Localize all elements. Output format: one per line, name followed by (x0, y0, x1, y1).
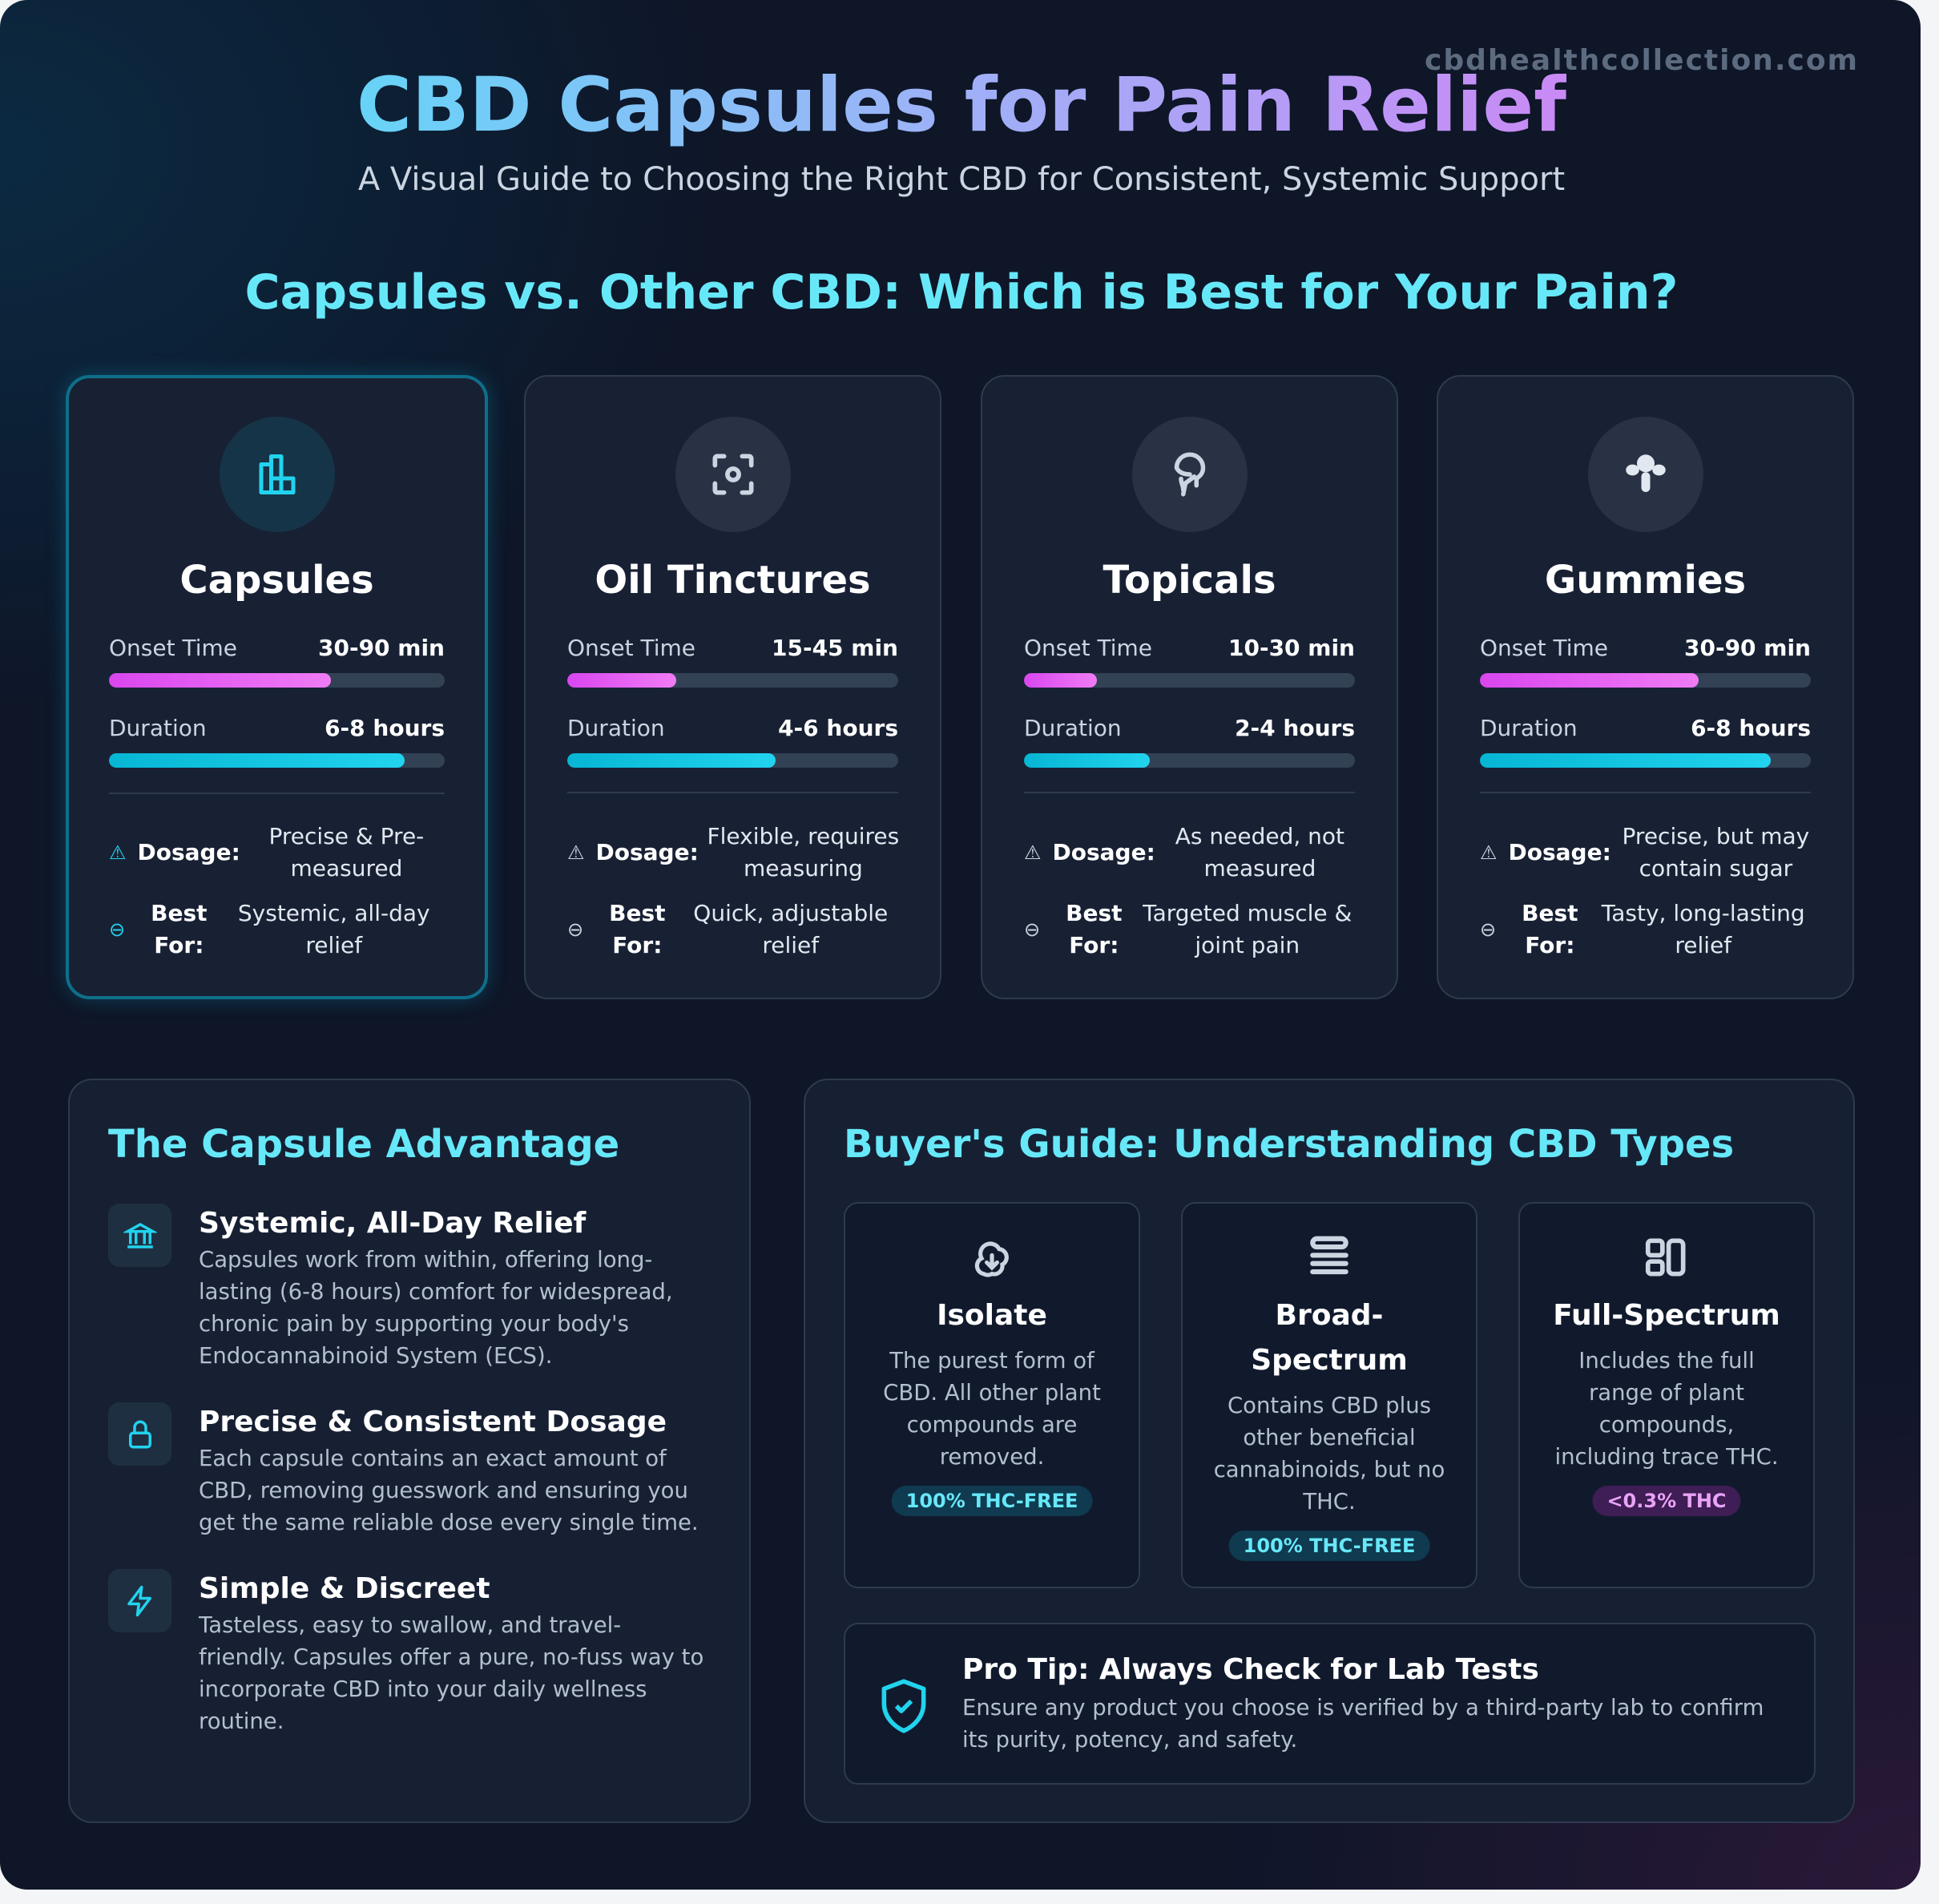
panel: capsule advantage: friendly. Capsules offer a pure, no-fuss way to (199, 1644, 703, 1670)
panel: capsule advantage: Systemic, All-Day Relief (199, 1207, 586, 1240)
panel: capsule advantage: Precise & Consistent Dosage (199, 1406, 667, 1438)
panel: capsule advantage: lasting (6-8 hours) comfort for widespread, (199, 1279, 673, 1305)
best for: For: (1525, 932, 1574, 958)
best for: ⊖ (1480, 918, 1496, 941)
best for: ⊖ (1024, 918, 1040, 941)
duration row (1024, 715, 1355, 741)
best for: Quick, adjustable (693, 900, 888, 926)
dosage: As needed, not (1175, 823, 1344, 849)
dosage: measured (1203, 855, 1316, 881)
best for (109, 900, 430, 958)
subcard: full-spectrum: including trace THC. (1554, 1444, 1779, 1470)
subcard: full-spectrum (1518, 1202, 1815, 1588)
watermark: cbdhealthcollection.com (1425, 44, 1859, 77)
subcard: full-spectrum: Full-Spectrum (1553, 1299, 1780, 1332)
card: topicals (981, 375, 1398, 999)
dosage (109, 823, 424, 881)
callout: pro tip: Pro Tip: Always Check for Lab Tests (962, 1653, 1539, 1686)
subcard: broad-spectrum: cannabinoids, but no (1214, 1457, 1445, 1482)
best for: relief (762, 932, 819, 958)
best for: Best (609, 900, 665, 926)
duration row: 6-8 hours (325, 715, 445, 741)
title: CBD Capsules for Pain Relief (357, 62, 1566, 149)
best for (1024, 900, 1352, 958)
duration row: 6-8 hours (1691, 715, 1811, 741)
duration row: Duration (109, 715, 207, 741)
duration row: 4-6 hours (778, 715, 898, 741)
onset row: 10-30 min (1228, 635, 1355, 661)
best for: ⊖ (567, 918, 583, 941)
panel: capsule advantage: Simple & Discreet (199, 1572, 490, 1605)
onset row: Onset Time (1480, 635, 1608, 661)
dosage: ⚠ (1480, 841, 1498, 864)
panel: capsule advantage (68, 1079, 751, 1823)
subcard: isolate: CBD. All other plant (883, 1380, 1101, 1406)
card: oil tinctures (524, 375, 941, 999)
subcard: broad-spectrum: other beneficial (1243, 1425, 1416, 1450)
subcard: isolate: Isolate (937, 1299, 1047, 1332)
onset row (1480, 635, 1811, 661)
item: precise dosage (108, 1402, 699, 1535)
subcard: full-spectrum: range of plant (1589, 1380, 1744, 1406)
panel heading: The Capsule Advantage (108, 1122, 619, 1167)
dosage (1480, 823, 1809, 881)
subcard: broad-spectrum: THC. (1303, 1489, 1356, 1515)
panel: capsule advantage: Endocannabinoid System (ECS). (199, 1343, 552, 1369)
duration row: Duration (1480, 715, 1578, 741)
subcard: isolate: removed. (940, 1444, 1044, 1470)
best for: For: (1069, 932, 1119, 958)
item: simple discreet (108, 1569, 703, 1734)
best for: Best (1066, 900, 1122, 926)
card title: Oil Tinctures (595, 558, 871, 603)
panel: capsule advantage: Capsules work from within, offering long- (199, 1247, 652, 1273)
subcard: broad-spectrum: Contains CBD plus (1227, 1393, 1431, 1418)
duration row: 2-4 hours (1235, 715, 1355, 741)
panel: capsule advantage: chronic pain by supporting your body's (199, 1311, 629, 1337)
onset row: Onset Time (567, 635, 695, 661)
card: capsules (66, 375, 488, 999)
dosage: Precise & Pre- (269, 823, 424, 849)
subcard: full-spectrum: compounds, (1599, 1412, 1734, 1438)
panel: capsule advantage: Tasteless, easy to swallow, and travel- (199, 1612, 621, 1638)
best for (567, 900, 888, 958)
best for: joint pain (1195, 932, 1300, 958)
duration row: Duration (1024, 715, 1122, 741)
panel: capsule advantage: incorporate CBD into your daily wellness (199, 1676, 647, 1702)
dosage: Flexible, requires (707, 823, 899, 849)
best for: relief (305, 932, 362, 958)
best for (1480, 900, 1805, 958)
panel: capsule advantage: routine. (199, 1708, 284, 1734)
onset row: 30-90 min (1684, 635, 1811, 661)
subcard: broad-spectrum: Broad- (1276, 1299, 1383, 1332)
card title: Topicals (1103, 558, 1276, 603)
subcard: isolate (844, 1202, 1140, 1588)
best for: For: (154, 932, 204, 958)
card title: Capsules (179, 558, 374, 603)
subcard: broad-spectrum: 100% THC-FREE (1244, 1535, 1415, 1557)
dosage (1024, 823, 1344, 881)
callout: pro tip: Ensure any product you choose is verified by a third-party lab to confirm (962, 1695, 1764, 1720)
best for: Targeted muscle & (1143, 900, 1352, 926)
subcard: isolate: compounds are (907, 1412, 1077, 1438)
best for: Best (151, 900, 207, 926)
duration row: Duration (567, 715, 665, 741)
onset row: Onset Time (109, 635, 237, 661)
best for: relief (1675, 932, 1731, 958)
subcard: full-spectrum: Includes the full (1578, 1348, 1755, 1374)
best for: ⊖ (109, 918, 125, 941)
callout: pro tip: its purity, potency, and safety. (962, 1727, 1297, 1753)
duration row (567, 715, 898, 741)
best for: For: (612, 932, 662, 958)
dosage: ⚠ (109, 841, 127, 864)
onset row (1024, 635, 1355, 661)
section heading: Capsules vs. Other CBD: Which is Best for Your Pain? (245, 264, 1678, 321)
best for: Systemic, all-day (238, 900, 430, 926)
onset row (109, 635, 445, 661)
panel heading: Buyer's Guide: Understanding CBD Types (844, 1122, 1734, 1167)
dosage (567, 823, 899, 881)
dosage: ⚠ (1024, 841, 1042, 864)
icon: gummy (1588, 417, 1703, 532)
item: systemic relief (108, 1204, 673, 1369)
dosage: measured (290, 855, 402, 881)
card: gummies (1437, 375, 1854, 999)
best for: Tasty, long-lasting (1602, 900, 1805, 926)
dosage: Dosage: (1509, 839, 1611, 865)
panel: capsule advantage: CBD, removing guesswork and ensuring you (199, 1478, 688, 1503)
panel: capsule advantage: get the same reliable dose every single time. (199, 1510, 699, 1535)
dosage: Precise, but may (1623, 823, 1809, 849)
dosage: Dosage: (596, 839, 699, 865)
onset row: Onset Time (1024, 635, 1152, 661)
icon: tincture (675, 417, 790, 532)
card title: Gummies (1545, 558, 1746, 603)
subcard: full-spectrum: <0.3% THC (1606, 1490, 1727, 1512)
duration row (1480, 715, 1811, 741)
dosage: Dosage: (1053, 839, 1155, 865)
onset row: 30-90 min (318, 635, 445, 661)
subtitle: A Visual Guide to Choosing the Right CBD for Consistent, Systemic Support (358, 161, 1565, 198)
dosage: measuring (744, 855, 863, 881)
subcard: broad-spectrum (1181, 1202, 1477, 1588)
icon: shield (881, 1679, 926, 1733)
panel: capsule advantage: Each capsule contains an exact amount of (199, 1446, 667, 1471)
dosage: Dosage: (138, 839, 240, 865)
subcard: isolate: 100% THC-FREE (906, 1490, 1078, 1512)
onset row: 15-45 min (772, 635, 898, 661)
icon: topical (1131, 417, 1247, 532)
best for: Best (1522, 900, 1578, 926)
duration row (109, 715, 445, 741)
icon: capsules (220, 417, 335, 532)
dosage: contain sugar (1639, 855, 1792, 881)
panel: buyer's guide (804, 1079, 1855, 1823)
callout: pro tip (844, 1623, 1816, 1785)
subcard: isolate: The purest form of (889, 1348, 1094, 1374)
dosage: ⚠ (567, 841, 585, 864)
subcard: broad-spectrum: Spectrum (1251, 1344, 1408, 1377)
onset row (567, 635, 898, 661)
